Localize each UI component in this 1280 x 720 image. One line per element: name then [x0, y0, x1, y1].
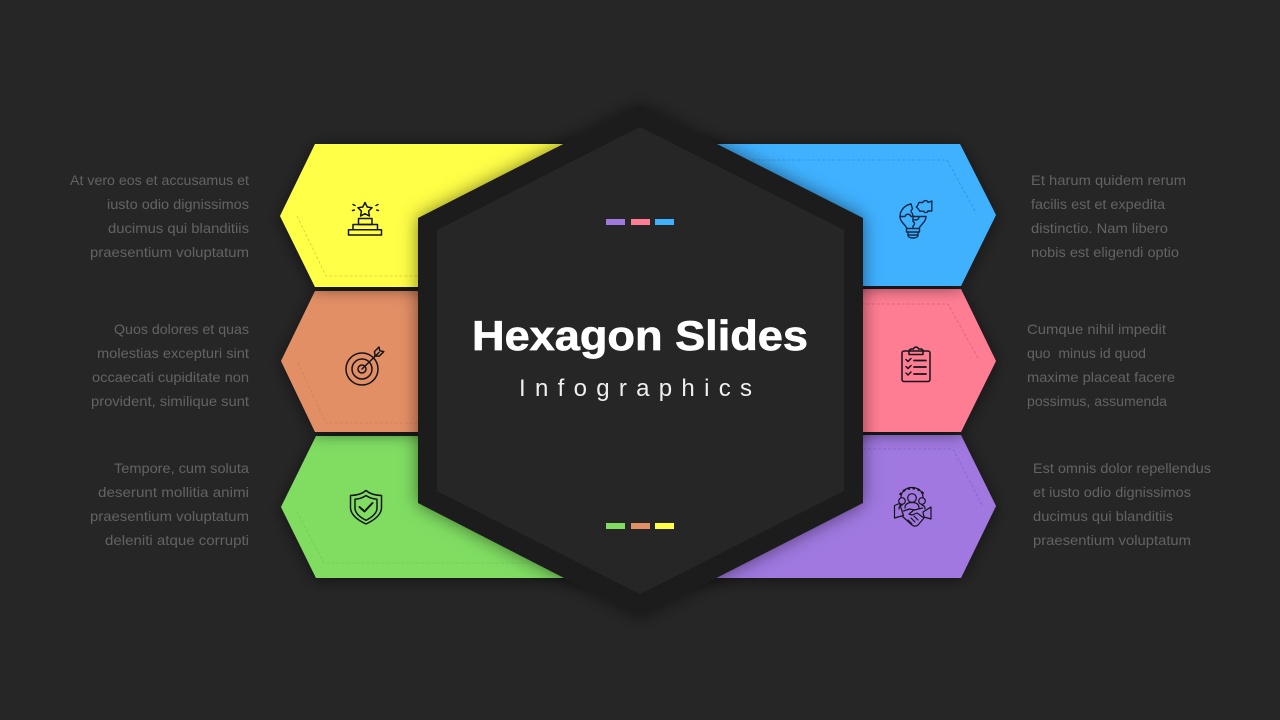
green dashed line	[297, 512, 545, 563]
text block: right middle: maxime placeat facere	[1027, 369, 1175, 385]
text block: right bottom: ducimus qui blanditiis	[1033, 508, 1173, 524]
text block: right top: Et harum quidem rerum	[1031, 172, 1186, 188]
green arrow shape	[281, 436, 640, 578]
text block: right bottom: praesentium voluptatum	[1033, 532, 1191, 548]
panel: blue	[640, 144, 996, 286]
text block: right middle	[1027, 321, 1175, 409]
panel: orange	[281, 291, 640, 432]
subtitle: Infographics	[519, 375, 752, 402]
text block: left middle: provident, similique sunt	[91, 393, 249, 409]
text block: left top: iusto odio dignissimos	[107, 196, 249, 212]
text block: right top	[1031, 172, 1186, 260]
text block: left top: At vero eos et accusamus et	[70, 172, 249, 188]
text block: left bottom: deserunt mollitia animi	[98, 484, 249, 500]
title: Hexagon Slides	[472, 312, 808, 359]
yellow dashed line	[297, 216, 420, 276]
icon: target with arrow	[346, 347, 384, 385]
blue arrow shape	[640, 144, 996, 286]
text block: left top	[70, 172, 249, 260]
orange dashed line	[298, 363, 420, 423]
central hexagon	[418, 105, 863, 617]
text block: right bottom: Est omnis dolor repellendus	[1033, 460, 1211, 476]
text block: left top: praesentium voluptatum	[90, 244, 249, 260]
text block: left middle: molestias excepturi sint	[97, 345, 249, 361]
panel: yellow	[280, 144, 640, 287]
icon: podium with star	[348, 202, 382, 235]
text block: left middle: Quos dolores et quas	[114, 321, 249, 337]
text block: left bottom: Tempore, cum soluta	[114, 460, 249, 476]
icon: gear people handshake	[894, 488, 931, 526]
panel: pink	[640, 289, 996, 432]
text block: left middle	[91, 321, 249, 409]
icon: puzzle light bulb	[900, 201, 932, 238]
orange arrow shape	[281, 291, 640, 432]
text block: right middle: Cumque nihil impedit	[1027, 321, 1166, 337]
purple dashed line	[860, 449, 982, 505]
text block: right bottom	[1033, 460, 1211, 548]
text block: right top: nobis est eligendi optio	[1031, 244, 1179, 260]
blue dashed line	[750, 160, 975, 211]
icon: shield with check	[350, 490, 382, 524]
text block: right middle: quo minus id quod	[1027, 345, 1146, 361]
text block: left bottom: praesentium voluptatum	[90, 508, 249, 524]
pink arrow shape	[640, 289, 996, 432]
text block: left bottom: deleniti atque corrupti	[105, 532, 249, 548]
text block: right middle: possimus, assumenda	[1027, 393, 1167, 409]
hexagon outer border	[418, 105, 863, 617]
bottom colour bars	[606, 523, 674, 529]
text block: right bottom: et iusto odio dignissimos	[1033, 484, 1191, 500]
panel: green	[281, 436, 640, 578]
text block: left bottom	[90, 460, 249, 548]
panel: purple	[640, 435, 996, 578]
text block: left middle: occaecati cupiditate non	[92, 369, 249, 385]
hexagon inner face	[437, 127, 844, 594]
top colour bars	[606, 219, 674, 225]
text block: right top: facilis est et expedita	[1031, 196, 1165, 212]
purple arrow shape	[640, 435, 996, 578]
text block: right top: distinctio. Nam libero	[1031, 220, 1168, 236]
yellow arrow shape	[280, 144, 640, 287]
pink dashed line	[860, 304, 978, 358]
icon: clipboard checklist	[902, 347, 930, 382]
text block: left top: ducimus qui blanditiis	[108, 220, 249, 236]
